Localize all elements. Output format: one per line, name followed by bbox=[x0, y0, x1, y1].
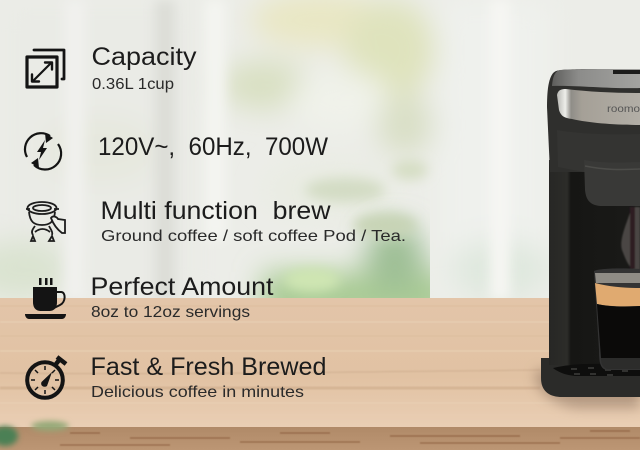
heading: power rating: 120V~, 60Hz, 700W bbox=[98, 133, 328, 161]
brand label: roomo bbox=[607, 104, 640, 115]
green foliage strip bbox=[245, 205, 430, 298]
dispenser spout bbox=[584, 160, 640, 206]
feature: capacity bbox=[27, 43, 197, 93]
icon: coffee cup on saucer bbox=[25, 278, 66, 319]
icon: portafilter and pods bbox=[26, 202, 65, 241]
heading: perfect amount: Perfect Amount bbox=[90, 273, 274, 301]
table edge bbox=[0, 427, 640, 450]
coffee machine bbox=[541, 69, 640, 397]
text: capacity value: 0.36L 1cup bbox=[92, 76, 174, 93]
text: brewing time: Delicious coffee in minutes bbox=[91, 384, 304, 401]
top lid bbox=[552, 69, 640, 88]
coffee stream and steam bbox=[621, 207, 640, 270]
base bbox=[541, 358, 640, 397]
icon: expand arrows bbox=[27, 50, 64, 87]
heading: multi function brew: Multi function brew bbox=[100, 197, 332, 225]
feature: brew bbox=[26, 197, 406, 245]
wooden table bbox=[0, 298, 640, 450]
feature: fast and fresh bbox=[27, 353, 326, 401]
steel panel bbox=[557, 89, 640, 125]
lower head block bbox=[557, 130, 640, 172]
heading: capacity: Capacity bbox=[92, 43, 197, 71]
body bbox=[549, 160, 640, 365]
icon: power cycle bolt bbox=[25, 133, 61, 170]
drip tray grill bbox=[553, 364, 640, 376]
feature: power bbox=[25, 133, 328, 170]
text: brew types: Ground coffee / soft coffee Pod / Tea. bbox=[101, 228, 406, 245]
text: serving sizes: 8oz to 12oz servings bbox=[91, 304, 250, 321]
icon: stopwatch bbox=[27, 357, 66, 398]
blurred garden background bbox=[0, 0, 548, 298]
heading: fast and fresh brewed: Fast & Fresh Brewed bbox=[90, 353, 326, 381]
machine head bbox=[547, 69, 640, 172]
machine shadow on table bbox=[535, 370, 640, 408]
glass with coffee bbox=[594, 268, 640, 370]
feature: perfect amount bbox=[25, 273, 274, 321]
blurred leaf bbox=[0, 421, 69, 446]
